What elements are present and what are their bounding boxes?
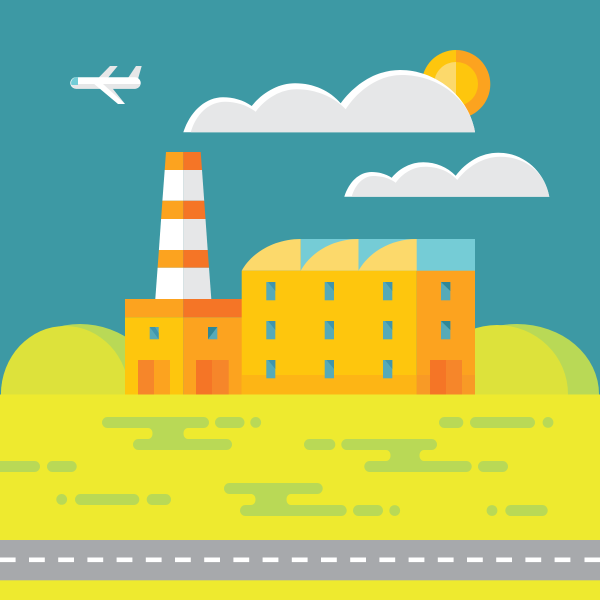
grass patch: top centre — [102, 417, 261, 450]
grass patch: lower centre — [224, 483, 400, 516]
sun — [422, 50, 490, 119]
left factory block — [125, 299, 242, 395]
ground — [0, 394, 600, 600]
hall door — [430, 360, 462, 395]
grass patch: left — [0, 461, 77, 472]
sawtooth roof — [242, 239, 475, 271]
small cloud — [344, 153, 549, 197]
window: left block 1 — [150, 327, 159, 339]
grass patch: top right — [439, 417, 553, 428]
grass patch: lower right — [487, 505, 548, 516]
hall windows — [266, 282, 450, 378]
grass patches — [0, 417, 553, 516]
left hill — [1, 324, 159, 464]
window: left block 2 — [208, 327, 217, 339]
grass patch: lower left — [56, 494, 171, 505]
main factory hall — [242, 239, 475, 395]
door: left block 1 — [138, 360, 170, 395]
hall walls — [242, 271, 475, 395]
chimney — [155, 152, 211, 299]
airplane — [70, 66, 142, 104]
road dashes — [0, 558, 600, 562]
right hill — [426, 324, 599, 464]
road — [0, 540, 600, 580]
door: left block 2 — [196, 360, 229, 395]
grass patch: centre right — [304, 439, 508, 472]
large cloud — [183, 70, 475, 132]
